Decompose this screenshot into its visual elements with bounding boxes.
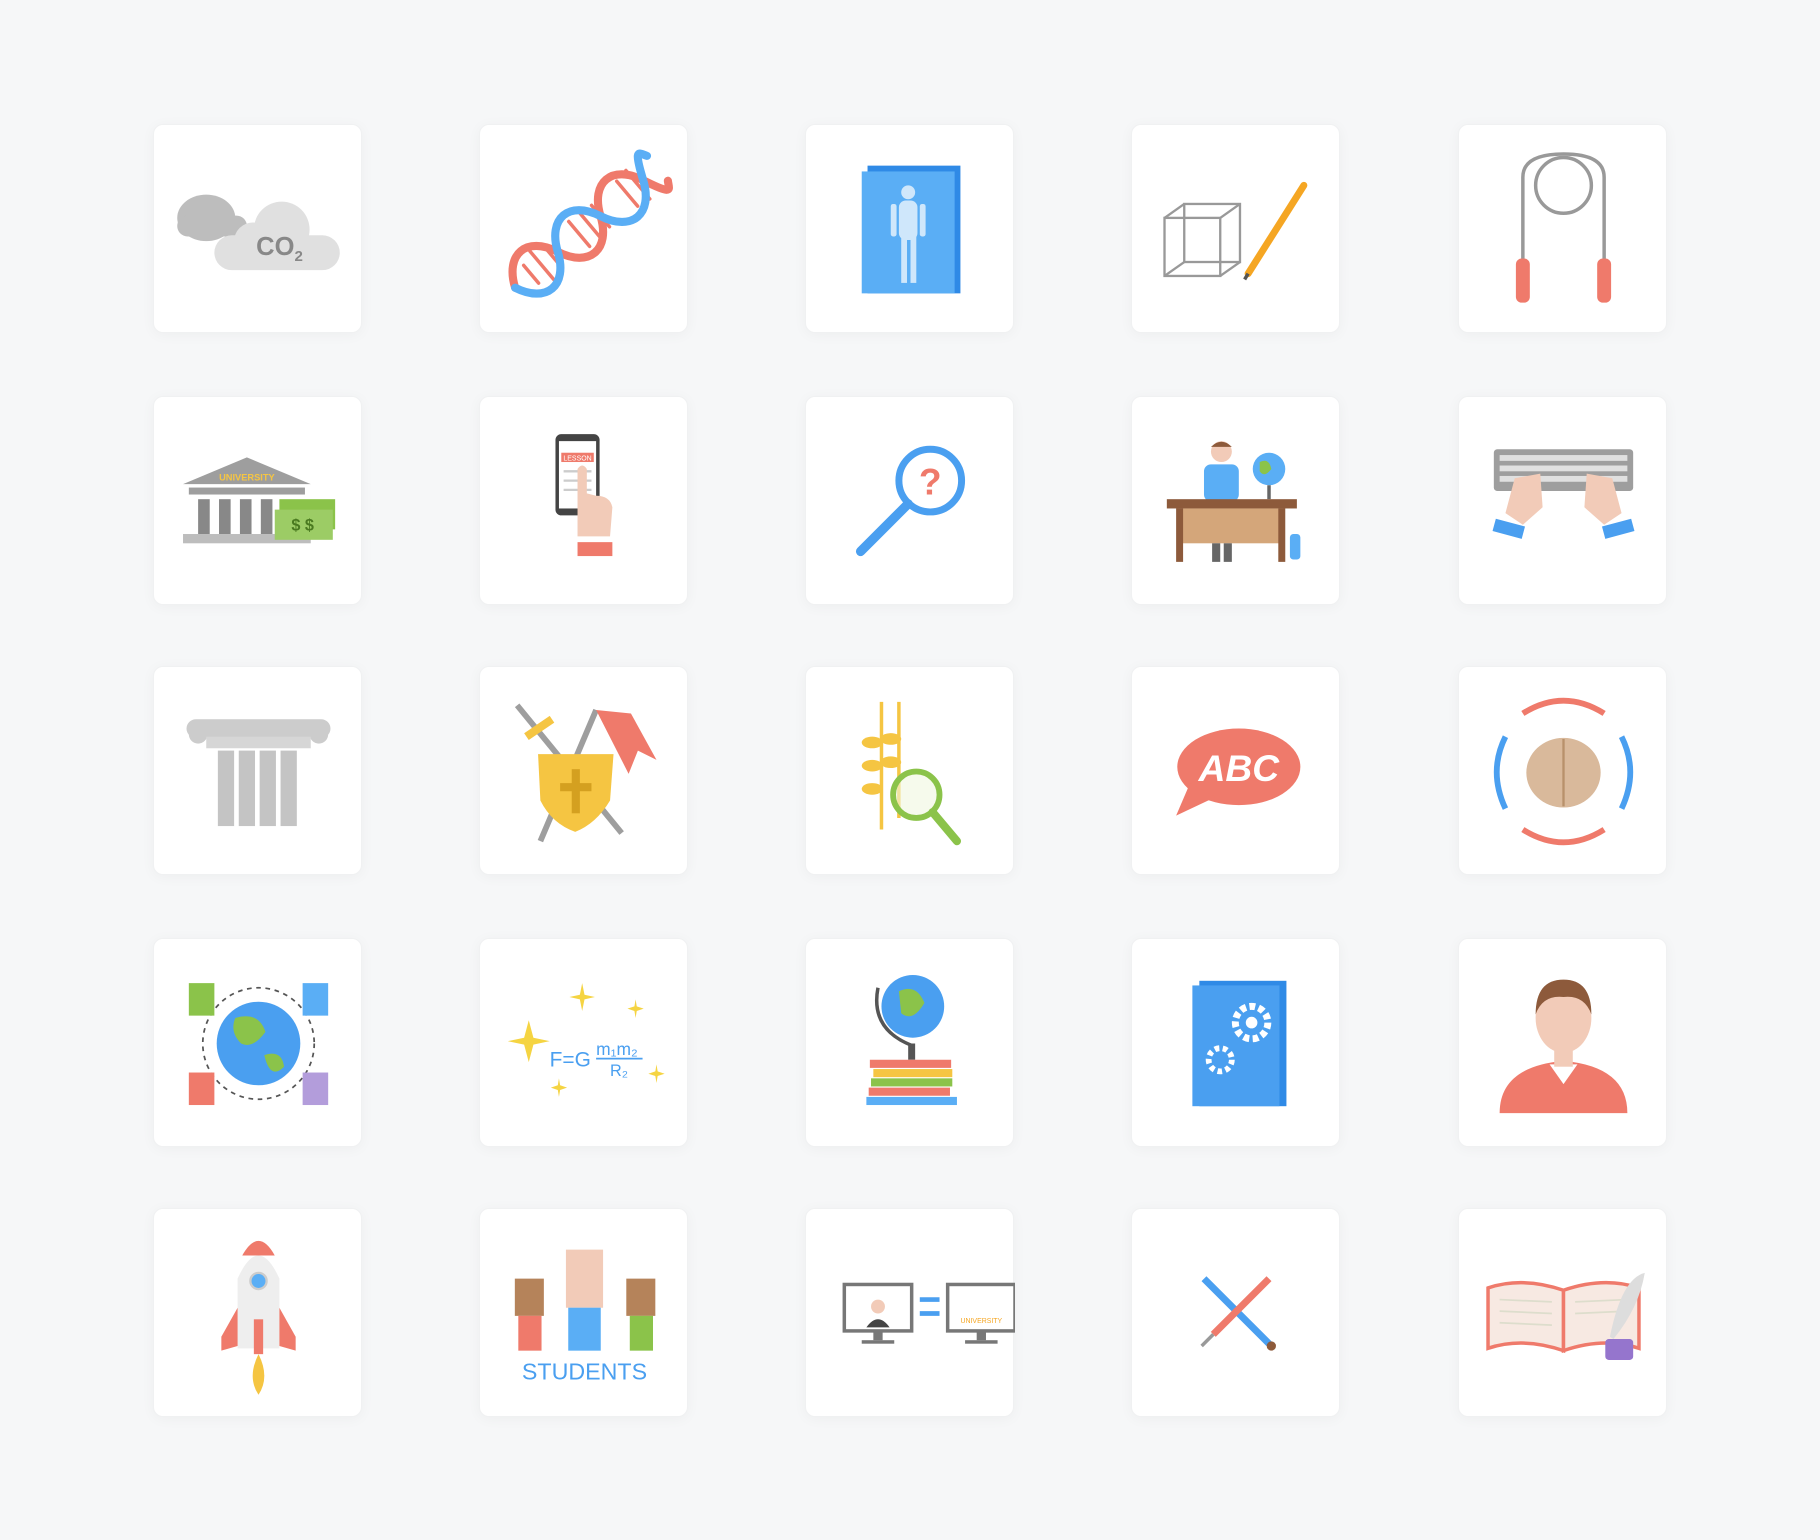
icon: book with gears: [1192, 981, 1286, 1106]
icon: formula with sparkles: [508, 983, 665, 1097]
card: rocket: [153, 1208, 362, 1417]
icon: raised hands: STUDENTS: [522, 1359, 647, 1385]
card: column: [153, 666, 362, 875]
card: wheat research: [805, 666, 1014, 875]
icon: brain with arrows: [1497, 701, 1630, 842]
icon: wireframe cube: [1165, 204, 1240, 276]
icon: rocket: [221, 1241, 296, 1395]
icon: open book with ink: [1488, 1273, 1645, 1360]
icon: desk person globe: [1167, 441, 1300, 562]
icon: globe and stacked books: [866, 975, 957, 1105]
card: anatomy book: [805, 124, 1014, 333]
icon: building with money: UNIVERSITY: [219, 473, 276, 483]
card: gear book: [1131, 938, 1340, 1147]
icon: two monitors: UNIVERSITY: [960, 1318, 1003, 1325]
icon: clouds: 2: [294, 248, 303, 265]
card: globe on books: [805, 938, 1014, 1147]
icon: earth with books: [189, 983, 328, 1105]
icon: magnifier with question: [861, 449, 962, 551]
card: ABC speech: [1131, 666, 1340, 875]
icon: keyboard hands: [1493, 449, 1634, 539]
icon: building with money: [183, 457, 335, 543]
icon: blue book with body: [862, 166, 960, 293]
card: cube and pencil: [1131, 124, 1340, 333]
card: online university: [805, 1208, 1014, 1417]
card: gravity formula: [479, 938, 688, 1147]
icon: pencil and brush: [1202, 1279, 1276, 1351]
card: mobile lesson: [479, 396, 688, 605]
icon: clouds: [177, 195, 340, 270]
card: world subjects: [153, 938, 362, 1147]
icon: two monitors: [844, 1284, 1015, 1344]
card: students: [479, 1208, 688, 1417]
icon: clouds: CO: [256, 233, 294, 261]
icon: raised hands: [515, 1250, 655, 1385]
icon: sword shield: [517, 705, 656, 841]
icon: greek column: [187, 719, 330, 826]
icon: formula with sparkles: R₂: [610, 1062, 628, 1080]
card: crossed tools: [1131, 1208, 1340, 1417]
icon: formula with sparkles: m₁m₂: [596, 1039, 638, 1059]
card: jump rope: [1458, 124, 1667, 333]
card: DNA: [479, 124, 688, 333]
card: brain cycle: [1458, 666, 1667, 875]
icon: speech bubble ABC: ABC: [1198, 747, 1280, 789]
icon: pencil: [1245, 185, 1304, 279]
card: search question: [805, 396, 1014, 605]
icon: phone and hand: [555, 434, 612, 556]
card: typing keyboard: [1458, 396, 1667, 605]
card: person avatar: [1458, 938, 1667, 1147]
icon: magnifier with question: ?: [919, 461, 942, 503]
icon: building with money: $ $: [291, 517, 314, 535]
icon: formula with sparkles: F=G: [550, 1049, 591, 1072]
icon: phone and hand: LESSON: [563, 455, 592, 462]
card: university cost: [153, 396, 362, 605]
card: sword shield flag: [479, 666, 688, 875]
card: book and quill: [1458, 1208, 1667, 1417]
icon: wheat and magnifier: [862, 702, 957, 841]
card: CO2 cloud: [153, 124, 362, 333]
card: student at desk: [1131, 396, 1340, 605]
icon: speech bubble ABC: [1176, 729, 1300, 816]
icon: jump rope: [1516, 154, 1611, 303]
icon: dna helix: [499, 150, 673, 306]
icon: avatar: [1500, 980, 1627, 1113]
